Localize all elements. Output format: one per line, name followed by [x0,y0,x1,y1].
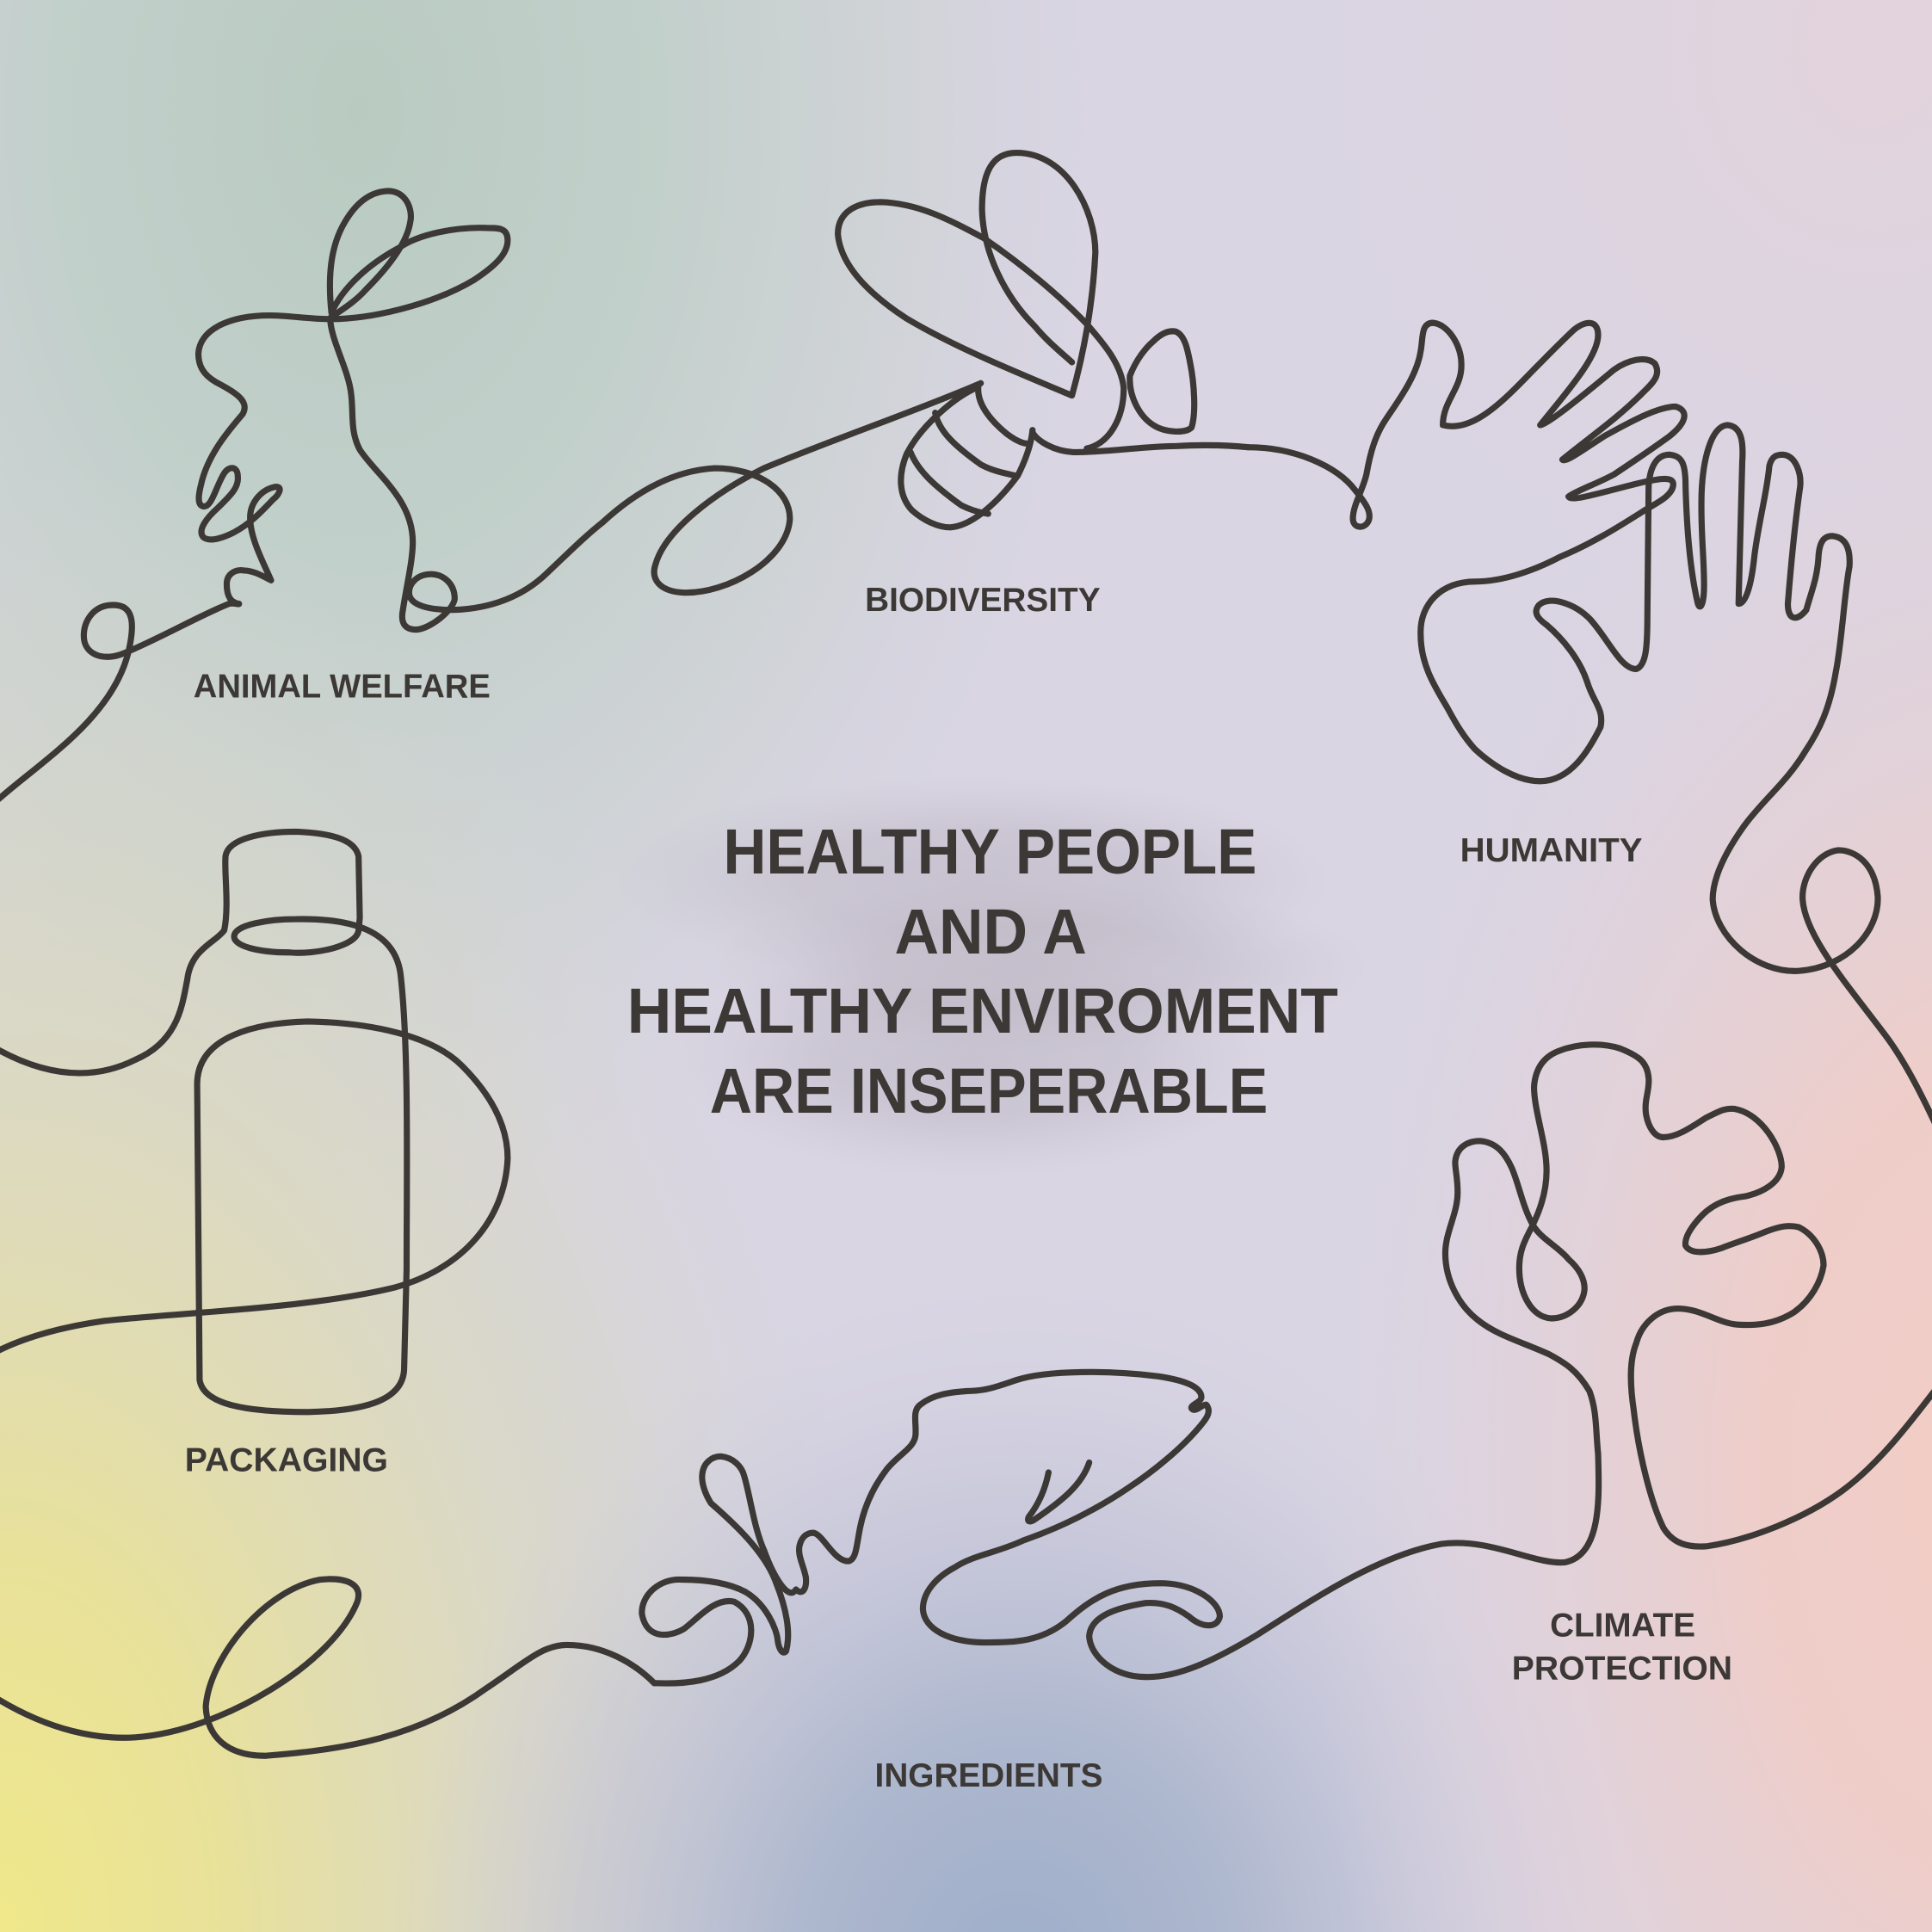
label: climate protection: CLIMATE [1550,1607,1695,1644]
bee base line [1033,433,1248,452]
bee stripes [910,413,1015,514]
illustration: bee [838,153,1248,528]
leaf vein [1028,1462,1089,1522]
label: animal welfare: ANIMAL WELFARE [194,668,491,705]
connecting line: loop to bee [602,383,981,593]
label: climate protection [1512,1607,1732,1687]
illustration: leaf and flower [642,1372,1599,1683]
central title: AND A [894,896,1087,967]
illustration: tree [1445,1045,1932,1546]
illustration: two hands [1248,323,1849,827]
connecting line: bottom left loop [0,1579,654,1756]
label: ingredients: INGREDIENTS [875,1757,1102,1794]
label: packaging: PACKAGING [185,1442,388,1479]
label: humanity: HUMANITY [1460,832,1643,869]
illustration: rabbit line [0,191,602,804]
bee wings [838,153,1124,448]
label: climate protection: PROTECTION [1512,1650,1732,1687]
connecting line: right loop [1713,827,1932,1127]
bee abdomen [901,387,1033,528]
central title: HEALTHY PEOPLE [723,816,1256,887]
central title: HEALTHY ENVIROMENT [627,975,1338,1046]
central title: ARE INSEPERABLE [710,1055,1268,1126]
central title [627,816,1338,1126]
illustration: bottle [0,831,508,1412]
soft shadow behind central title [616,776,1367,1176]
label: biodiversity: BIODIVERSITY [865,582,1101,619]
bee head [1130,331,1194,431]
